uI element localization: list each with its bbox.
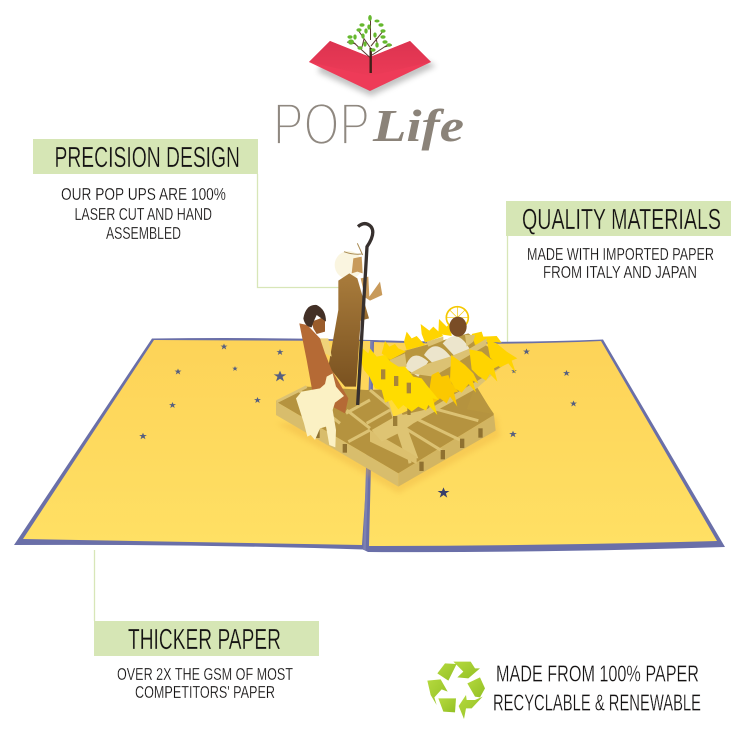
card cover: purple edge [14, 338, 725, 552]
heading bar [506, 201, 731, 236]
centre fold [364, 341, 372, 550]
front hay fringe [360, 347, 439, 415]
text block: OUR POP UPS ARE 100% [61, 184, 226, 204]
yellow fins [429, 372, 458, 407]
staff [358, 224, 373, 405]
panel: precision design [33, 139, 340, 288]
kneeling figure [299, 305, 348, 413]
left wall [276, 402, 398, 487]
inner dividers [277, 387, 478, 463]
tray floor [276, 387, 494, 473]
panel: recyclable [427, 660, 701, 719]
text block: FROM ITALY AND JAPAN [543, 262, 697, 282]
back dividers [390, 335, 487, 377]
connector line [94, 550, 96, 621]
tabs on hay [381, 369, 411, 393]
text block: LASER CUT AND HAND [74, 204, 212, 224]
logo: Pop Life [273, 15, 464, 158]
open card [14, 338, 725, 552]
cream discs [405, 356, 428, 377]
connector line [506, 235, 508, 346]
text block [493, 660, 701, 716]
left yellow panel [23, 340, 372, 545]
text block [117, 664, 293, 702]
text block: ASSEMBLED [106, 223, 181, 243]
baby with halo [446, 307, 468, 337]
wordmark Life: Life [372, 100, 464, 151]
right wall [398, 415, 496, 487]
heading: PRECISION DESIGN [54, 142, 240, 174]
right yellow panel [369, 341, 717, 546]
stars [139, 344, 577, 498]
interior [383, 333, 510, 407]
manger box [360, 319, 517, 415]
panel: thicker paper [94, 550, 319, 702]
text block: OVER 2X THE GSM OF MOST [117, 664, 293, 684]
text block: COMPETITORS' PAPER [135, 682, 275, 702]
text block [527, 244, 714, 282]
icon: tree [347, 15, 392, 73]
back hay [382, 319, 502, 360]
wordmark POP: POP [273, 92, 370, 158]
pop-up nativity scene [276, 224, 517, 493]
heading bar [33, 139, 258, 174]
heading bar [94, 621, 319, 656]
heading: THICKER PAPER [128, 624, 281, 656]
manger legs [370, 353, 507, 464]
lamb [296, 373, 344, 447]
base tray [276, 387, 496, 487]
icon: open red book [309, 41, 436, 96]
tabs [315, 428, 483, 471]
panel: quality materials [506, 201, 731, 346]
shepherd figure with staff [328, 224, 382, 405]
shadow [277, 417, 500, 493]
text block [61, 184, 226, 243]
connector line [258, 174, 340, 288]
icon: recycle arrows [427, 662, 485, 719]
